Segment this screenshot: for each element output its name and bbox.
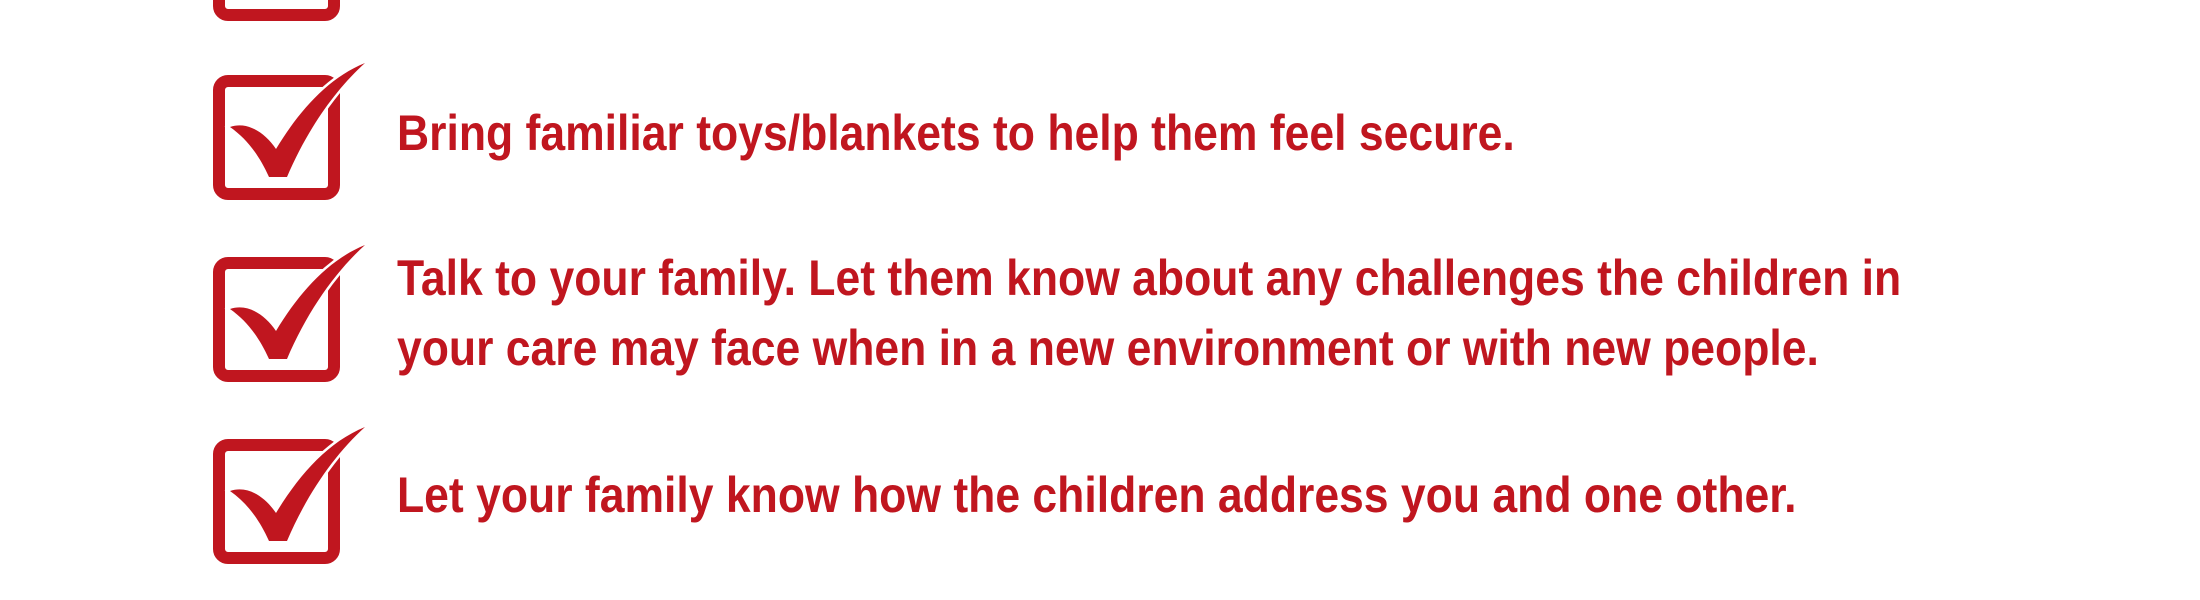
text: item 2 xyxy=(397,250,1901,376)
icon: checkbox 2 xyxy=(213,245,365,382)
text: item 2: your care may face when in a new environment or with new people. xyxy=(397,320,1819,376)
text: item 2: Talk to your family. Let them know about any challenges the children in xyxy=(397,250,1901,306)
text: item 1: Bring familiar toys/blankets to help them feel secure. xyxy=(397,105,1515,161)
icon: partial checkbox at top xyxy=(213,0,340,21)
text: item 3: Let your family know how the children address you and one other. xyxy=(397,467,1797,523)
icon: checkbox 1 xyxy=(213,63,365,200)
icon: checkbox 3 xyxy=(213,427,365,564)
